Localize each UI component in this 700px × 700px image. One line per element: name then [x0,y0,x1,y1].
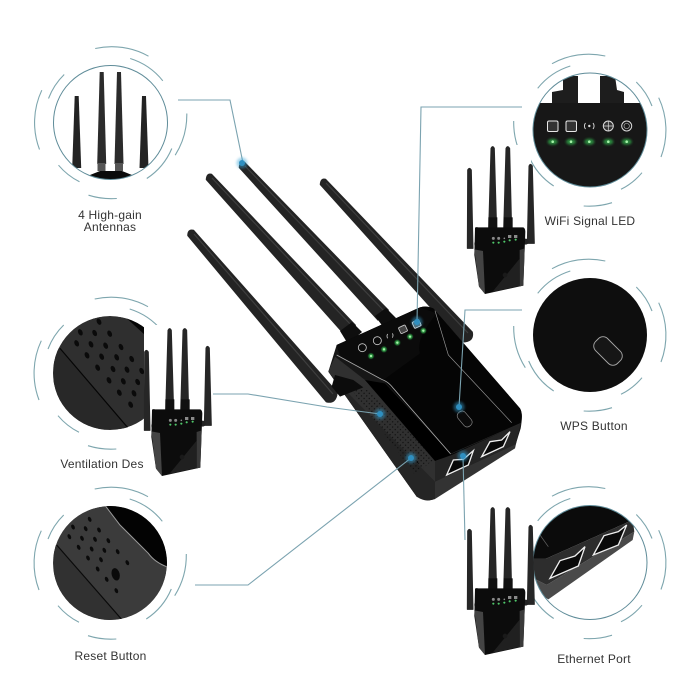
face LEDs [368,328,426,359]
detail: button outline [591,334,625,368]
ring arcs: ventilation [34,297,186,449]
top face [337,307,522,455]
panel: WiFi signal LED [514,54,666,228]
main product: wifi extender [188,162,522,500]
circle outline: LED [533,73,647,187]
reset pinhole [416,461,418,463]
panel: reset button [34,487,186,663]
panel: WPS button [514,259,666,433]
label: 4 High-gain Antennas: 4 High-gain [78,208,142,222]
main antennas [188,162,472,402]
detail circle: antennas [72,72,148,179]
label: WPS Button: WPS Button [560,419,628,433]
face icons [358,319,421,352]
mini device: bottom right [455,505,534,657]
ring arcs: Ethernet [514,487,666,639]
detail circle: WPS [533,278,647,392]
label: WiFi Signal LED: WiFi Signal LED [545,214,635,228]
ring arcs: WPS [514,259,666,411]
callout lines [178,100,522,585]
ring arcs: antennas [35,47,187,199]
green LEDs [548,139,632,145]
antenna highlights [194,166,468,394]
circle outline: antennas [54,66,168,180]
label: Ethernet Port: Ethernet Port [557,652,631,666]
detail circle: ventilation [53,316,144,430]
panel: 4 high-gain antennas [35,47,187,234]
status icons [548,121,632,132]
vent perforations [352,390,435,475]
panel: Ethernet port [534,486,666,663]
detail circle: LED [534,76,646,186]
callout dots [236,158,468,464]
label: Ventilation Des: Ventilation Des [60,457,144,471]
label: Reset Button: Reset Button [74,649,147,663]
detail circle: Ethernet [534,506,634,600]
ethernet ports [447,451,473,475]
vent side panel [328,357,452,500]
label: 4 High-gain Antennas: Antennas [84,220,136,234]
antenna connectors [340,308,396,344]
body silhouette [328,307,522,500]
mini device: ventilation [144,325,213,477]
mini device: top right [455,145,534,295]
circle outline: Ethernet [533,506,647,620]
panel: ventilation design [34,296,158,450]
pocket shadow [365,380,452,461]
front port band [435,423,521,482]
WPS button outline [456,409,474,429]
rubber hinge [332,375,363,397]
ring arcs: LED [514,54,666,206]
ring arcs: reset [34,487,186,639]
detail circle: reset [53,503,168,623]
